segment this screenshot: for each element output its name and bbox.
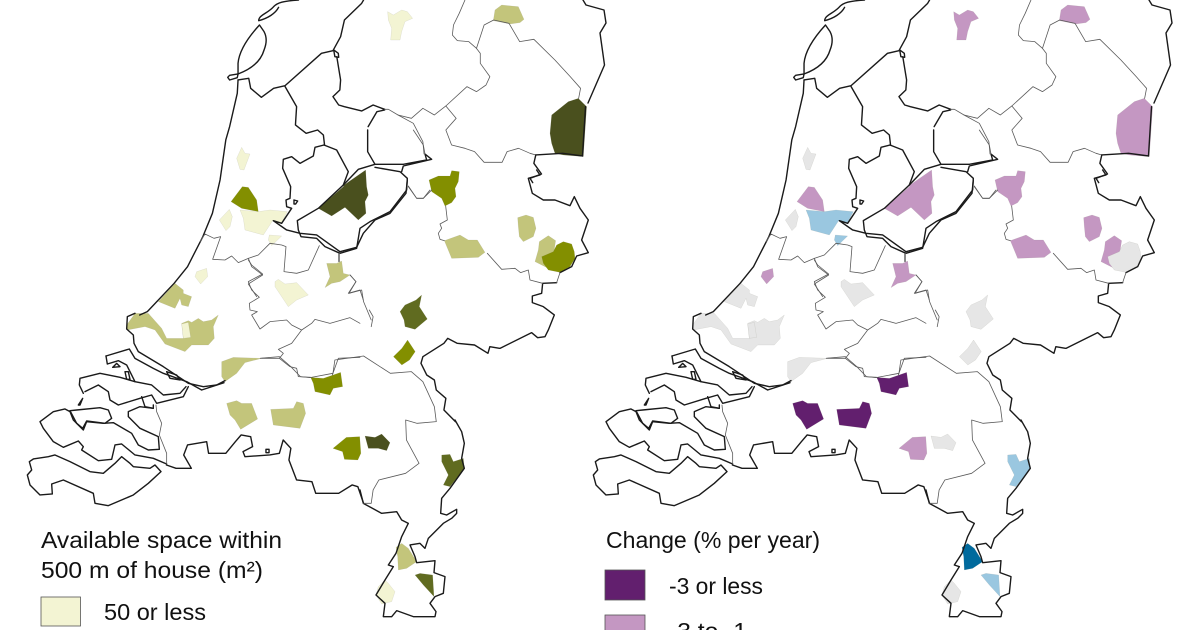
legend: change per year: [605, 527, 820, 630]
regions: available space classes: [127, 5, 587, 604]
legend label: 50 or less: [104, 599, 206, 625]
map: change per year (right panel): [593, 0, 1172, 617]
map outline: Netherlands coast and provinces (right): [593, 0, 1172, 617]
map: available space (left panel): [27, 0, 606, 617]
map outline: Netherlands coast and provinces: [27, 0, 606, 617]
legend title: Change (% per year): [606, 527, 820, 553]
swatch: -3 or less: [605, 570, 645, 600]
legend: available space: [41, 527, 282, 626]
legend title line 2: 500 m of house (m²): [41, 557, 263, 583]
legend title: Available space within: [41, 527, 282, 553]
swatch: 50 or less: [41, 597, 80, 626]
legend label: -3 or less: [669, 573, 763, 599]
regions: change classes: [693, 5, 1153, 604]
swatch: -3 to -1: [605, 615, 645, 630]
